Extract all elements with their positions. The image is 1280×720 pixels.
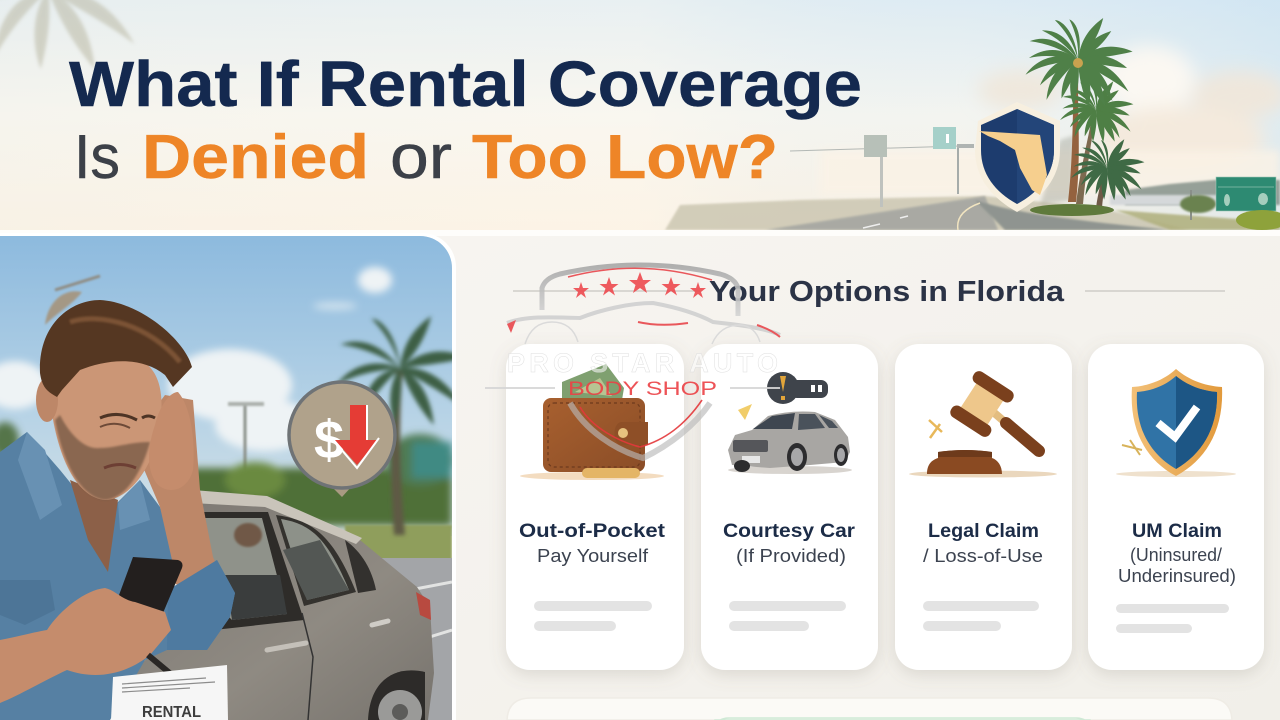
- damaged car: [130, 490, 434, 720]
- man: raised arm: [144, 395, 215, 584]
- title: What If Rental Coverage: [69, 48, 862, 120]
- panel: option cards: [506, 344, 1264, 670]
- title: [69, 48, 862, 192]
- card: courtesy car: [701, 344, 878, 670]
- icon: falling money bubble: [289, 382, 395, 497]
- highway: [665, 196, 1280, 230]
- icon: Florida shield: [975, 102, 1060, 212]
- icon: palm trees: [1026, 18, 1144, 216]
- card: out-of-pocket: Pay Yourself: [537, 546, 649, 566]
- palm tree in photo: [336, 314, 452, 538]
- background helicopter and lamp post: [45, 276, 264, 470]
- watermark logo: BODY SHOP: [568, 379, 717, 400]
- icon: car and key: [728, 372, 852, 474]
- card: UM claim: [1088, 344, 1264, 670]
- man: head: [50, 358, 162, 500]
- card: courtesy car: (If Provided): [736, 546, 846, 566]
- title: Is: [74, 123, 120, 192]
- rental document: [111, 655, 228, 720]
- card: out-of-pocket: [506, 344, 684, 670]
- card: legal claim: / Loss-of-Use: [923, 546, 1043, 566]
- card: out-of-pocket: Out-of-Pocket: [519, 521, 666, 542]
- green highway sign: [1180, 177, 1280, 230]
- header banner scene: [0, 0, 1280, 230]
- title: or: [390, 123, 452, 192]
- title: Denied: [142, 123, 369, 192]
- decorative palm, top left: [0, 0, 142, 69]
- card: UM claim: (Uninsured/: [1130, 545, 1222, 565]
- clouds in photo: [0, 267, 392, 451]
- man: phone: [119, 557, 182, 612]
- icon: wallet: [520, 364, 664, 480]
- man: hand at temple: [149, 392, 182, 461]
- watermark logo: [485, 265, 780, 458]
- grass and road: [345, 525, 452, 561]
- horizon haze and hills: [1078, 149, 1280, 192]
- background trees: [0, 422, 454, 526]
- panel: bottom summary: [507, 698, 1232, 720]
- icon: falling money bubble: $: [314, 410, 344, 470]
- white strip below header: [0, 230, 1280, 236]
- man: hand holding phone: [0, 588, 171, 703]
- road signs: [790, 127, 974, 207]
- card: UM claim: UM Claim: [1132, 521, 1222, 542]
- icon: gavel: [909, 369, 1057, 478]
- watermark logo: PRO STAR AUTO: [507, 348, 778, 378]
- icon: shield with check: [1116, 369, 1236, 477]
- man: denim shirt: [0, 432, 235, 720]
- card: legal claim: [895, 344, 1072, 670]
- card: UM claim: Underinsured): [1118, 566, 1236, 586]
- panel: stressed driver photo: [0, 233, 468, 720]
- clouds: [980, 42, 1280, 152]
- card: legal claim: Legal Claim: [928, 521, 1039, 542]
- section heading: Your Options in Florida: Your Options in Florida: [709, 276, 1065, 308]
- card: courtesy car: Courtesy Car: [723, 521, 856, 542]
- title: Too Low?: [472, 123, 778, 192]
